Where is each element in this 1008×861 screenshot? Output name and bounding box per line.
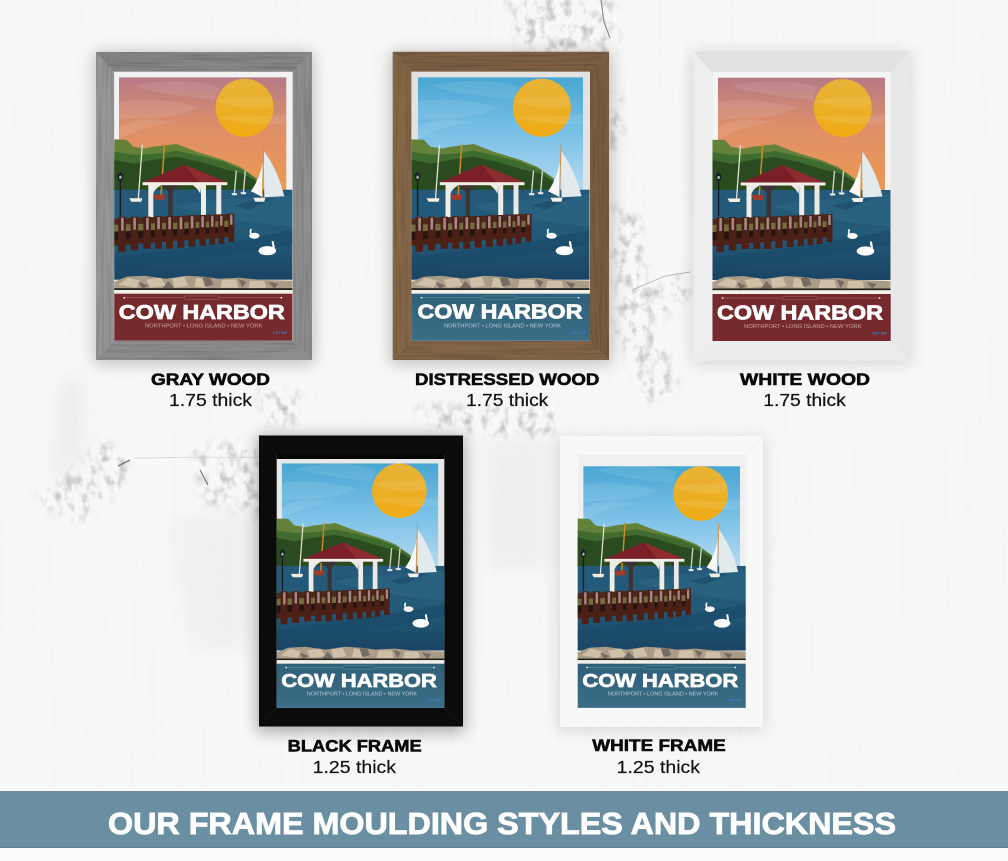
frame: white wood [691, 52, 911, 364]
poster: blue sky with teal banner [412, 72, 590, 341]
label: white wood: 1.75 thick [763, 390, 846, 410]
poster subtitle: NORTHPORT • LONG ISLAND • NEW YORK [444, 324, 561, 330]
poster badge: EST 305 [273, 331, 287, 335]
frame moulding: white [560, 436, 763, 727]
poster subtitle: NORTHPORT • LONG ISLAND • NEW YORK [744, 324, 862, 330]
frame: white frame [558, 436, 765, 731]
poster badge: EST 305 [872, 332, 886, 336]
poster title: COW HARBOR [418, 302, 583, 324]
poster: blue sky with teal banner [277, 455, 444, 708]
label: white frame: WHITE FRAME [592, 736, 726, 755]
label: gray wood: GRAY WOOD [151, 370, 270, 389]
frame: black frame [257, 436, 465, 732]
frame moulding: white wood [693, 52, 909, 361]
poster title: COW HARBOR [582, 670, 739, 691]
frame: distressed wood [390, 52, 612, 364]
frame moulding: distressed wood [393, 52, 609, 360]
poster badge: EST 305 [729, 699, 742, 703]
label: white frame [592, 736, 726, 777]
poster: sunset with red banner [114, 72, 292, 341]
label: white wood: WHITE WOOD [740, 370, 870, 389]
label: distressed wood: 1.75 thick [466, 390, 549, 410]
poster title: COW HARBOR [717, 302, 884, 324]
poster subtitle: NORTHPORT • LONG ISLAND • NEW YORK [608, 692, 719, 698]
label: distressed wood: DISTRESSED WOOD [415, 370, 599, 389]
label: distressed wood [415, 370, 599, 410]
poster title: COW HARBOR [119, 302, 285, 324]
poster subtitle: NORTHPORT • LONG ISLAND • NEW YORK [307, 692, 418, 698]
frame moulding: gray wood [96, 52, 312, 360]
frame: gray wood [94, 52, 314, 364]
poster subtitle: NORTHPORT • LONG ISLAND • NEW YORK [145, 324, 263, 330]
poster: blue sky with teal banner [578, 455, 746, 708]
footer heading: OUR FRAME MOULDING STYLES AND THICKNESS [108, 806, 896, 841]
label: gray wood: 1.75 thick [169, 390, 252, 410]
label: black frame: 1.25 thick [313, 757, 396, 777]
label: black frame: BLACK FRAME [288, 736, 422, 756]
label: white wood [740, 370, 870, 410]
label: white frame: 1.25 thick [617, 757, 700, 777]
poster: sunset with red banner [712, 72, 891, 341]
poster badge: EST 305 [572, 331, 585, 335]
footer band [0, 791, 1008, 848]
label: black frame [288, 736, 422, 777]
frame moulding: black [259, 436, 463, 726]
poster badge: EST 305 [427, 699, 441, 703]
label: gray wood [151, 370, 270, 410]
poster title: COW HARBOR [281, 670, 437, 691]
